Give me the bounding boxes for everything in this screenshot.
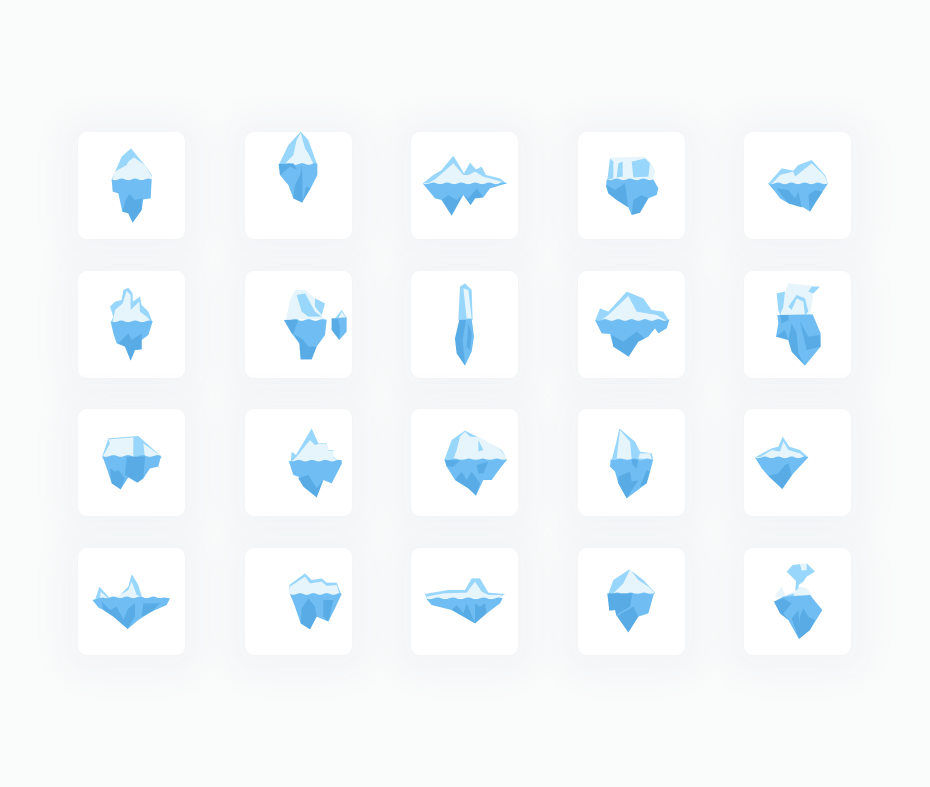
icon: iceberg 2	[279, 132, 317, 203]
icon: iceberg 7 with fragment	[284, 290, 347, 359]
icon: iceberg 3	[423, 156, 507, 216]
icon: iceberg 6	[110, 288, 153, 361]
icon: iceberg 18	[425, 578, 505, 623]
icon: iceberg 12	[289, 428, 342, 497]
icon: iceberg 13	[444, 431, 507, 496]
icon: iceberg 20	[774, 563, 822, 639]
icon: iceberg 17	[289, 573, 342, 629]
icon: iceberg 8	[455, 283, 474, 366]
icon: iceberg 19	[607, 569, 655, 632]
icon: iceberg 11	[102, 436, 162, 489]
icon: iceberg 9	[595, 292, 670, 357]
icon: iceberg 10	[776, 283, 821, 366]
icon: iceberg 5	[768, 160, 828, 212]
icon: iceberg 1	[112, 148, 152, 223]
icon: iceberg 16	[92, 574, 170, 629]
icon: iceberg 15	[755, 437, 808, 489]
icon: iceberg 14	[610, 428, 653, 498]
icon: iceberg 4	[606, 157, 658, 215]
